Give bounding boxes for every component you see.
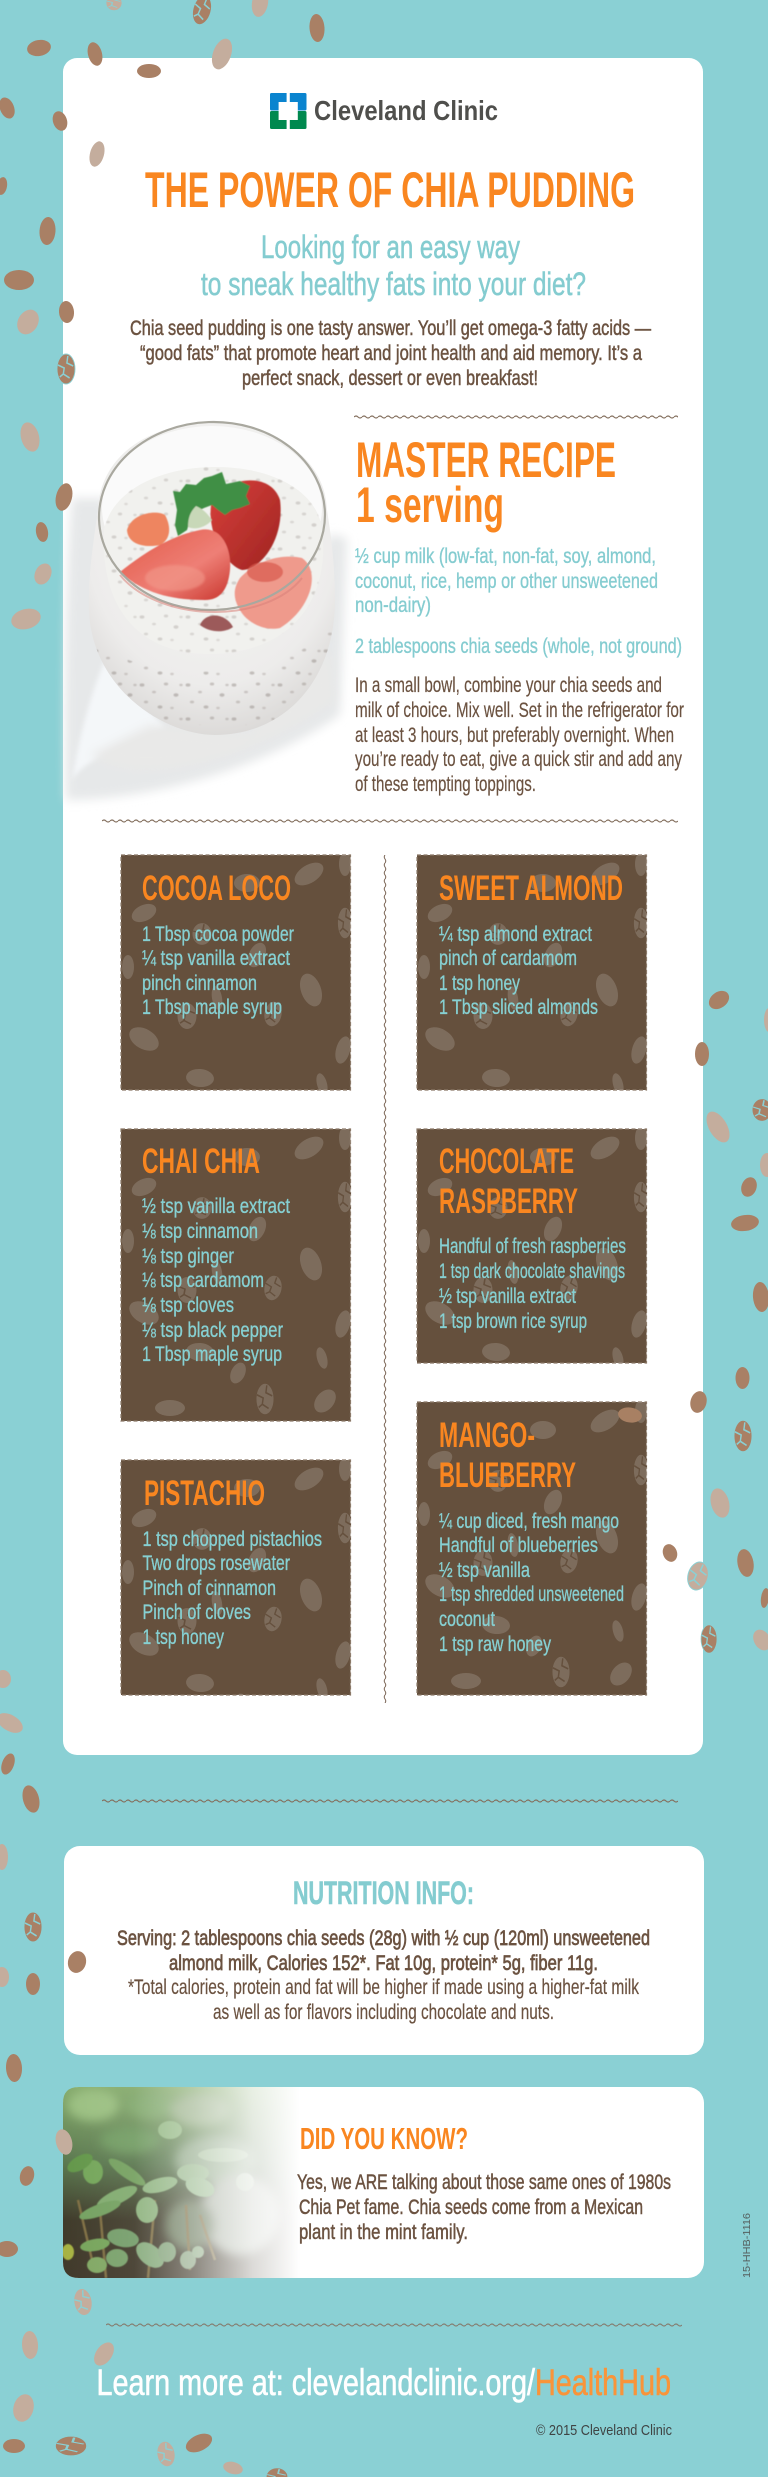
logo: Cleveland Clinic: [270, 93, 498, 129]
text: ingredients: ½ cup milk (low-fat, non-fat, soy, almond,: [355, 544, 656, 568]
heading: master recipe: [356, 432, 616, 533]
intro paragraph: [130, 316, 651, 390]
text: nutrition values: as well as for flavors including chocolate and nuts.: [213, 2000, 554, 2024]
card: sweet almond: pinch of cardamom: [439, 946, 577, 970]
card: mango blueberry: MANGO-: [439, 1416, 535, 1455]
card: pistachio: Pinch of cloves: [142, 1600, 251, 1624]
text: nutrition values: [117, 1926, 650, 2024]
subtitle: to sneak healthy fats into your diet?: [201, 266, 586, 302]
card: chai chia: ⅛ tsp cloves: [142, 1293, 234, 1317]
heading: did you know: DID YOU KNOW?: [300, 2121, 468, 2156]
card: chocolate raspberry: [417, 1126, 649, 1417]
panel: did you know: [62, 2087, 704, 2278]
card: pistachio: PISTACHIO: [144, 1474, 265, 1513]
panel: nutrition info: [64, 1846, 704, 2055]
card: mango blueberry: ½ tsp vanilla: [439, 1558, 530, 1582]
text: chia pet fact: plant in the mint family.: [299, 2220, 468, 2244]
text: nutrition values: almond milk, Calories 152*. Fat 10g, protein* 5g, fiber 11g.: [169, 1951, 598, 1975]
card: mango blueberry: 1 tsp raw honey: [439, 1632, 551, 1656]
card: cocoa loco: 1 Tbsp maple syrup: [142, 995, 282, 1019]
card: mango blueberry: BLUEBERRY: [439, 1456, 576, 1495]
text: chia pet fact: [297, 2170, 671, 2244]
card: chocolate raspberry: Handful of fresh raspberries: [439, 1234, 626, 1258]
photo: chia pudding in glass with strawberries: [65, 418, 347, 800]
card: chocolate raspberry: ½ tsp vanilla extract: [439, 1284, 576, 1308]
text: ingredients: coconut, rice, hemp or other unsweetened: [355, 569, 658, 593]
card: sweet almond: ¼ tsp almond extract: [439, 922, 592, 946]
logo: Cleveland Clinic: Cleveland Clinic: [314, 95, 498, 126]
card: chai chia: ½ tsp vanilla extract: [142, 1194, 290, 1218]
code: 15-HHB-1116: 15-HHB-1116: [742, 2213, 753, 2278]
card: cocoa loco: pinch cinnamon: [142, 971, 257, 995]
subtitle: [201, 229, 586, 302]
heading: master recipe: MASTER RECIPE: [356, 432, 616, 488]
photo: chia plants: [62, 2087, 300, 2278]
card: pistachio: Two drops rosewater: [142, 1551, 290, 1575]
card: sweet almond: [417, 852, 649, 1143]
card: cocoa loco: 1 Tbsp cocoa powder: [142, 922, 294, 946]
call to action link: Learn more at: clevelandclinic.org/HealthHub: [96, 2362, 671, 2403]
card: chocolate raspberry: 1 tsp dark chocolate shavings: [439, 1259, 625, 1283]
text: directions: of these tempting toppings.: [355, 772, 536, 796]
card: cocoa loco: COCOA LOCO: [142, 869, 291, 908]
text: ingredients: non-dairy): [355, 593, 431, 617]
heading: nutrition info: NUTRITION INFO:: [293, 1875, 474, 1911]
card: chai chia: ⅛ tsp black pepper: [142, 1318, 283, 1342]
text: directions: [355, 673, 684, 796]
card: cocoa loco: [121, 852, 353, 1143]
card: chai chia: [121, 1126, 353, 1421]
card: pistachio: 1 tsp honey: [142, 1625, 224, 1649]
card: chocolate raspberry: CHOCOLATE: [439, 1142, 574, 1181]
card: chai chia: 1 Tbsp maple syrup: [142, 1342, 282, 1366]
card: cocoa loco: ¼ tsp vanilla extract: [142, 946, 290, 970]
card: mango blueberry: 1 tsp shredded unsweetened: [439, 1582, 624, 1606]
card: mango blueberry: coconut: [439, 1607, 495, 1631]
card: sweet almond: 1 Tbsp sliced almonds: [439, 995, 598, 1019]
panel: main white card: [63, 58, 703, 1755]
card: sweet almond: 1 tsp honey: [439, 971, 520, 995]
card: mango blueberry: ¼ cup diced, fresh mango: [439, 1509, 619, 1533]
card: chocolate raspberry: 1 tsp brown rice syrup: [439, 1309, 587, 1333]
card: chai chia: ⅛ tsp ginger: [142, 1244, 234, 1268]
text: chia pet fact: Chia Pet fame. Chia seeds come from a Mexican: [299, 2195, 643, 2219]
text: ingredients: [355, 544, 682, 658]
card: chai chia: CHAI CHIA: [142, 1142, 260, 1181]
copyright: © 2015 Cleveland Clinic: [536, 2422, 672, 2439]
heading: master recipe: 1 serving: [356, 477, 504, 533]
subtitle: Looking for an easy way: [261, 229, 520, 265]
intro paragraph: perfect snack, dessert or even breakfast!: [242, 366, 538, 390]
card: pistachio: Pinch of cinnamon: [142, 1576, 276, 1600]
card: chai chia: ⅛ tsp cinnamon: [142, 1219, 258, 1243]
card: mango blueberry: [417, 1399, 649, 1695]
card: chai chia: ⅛ tsp cardamom: [142, 1268, 264, 1292]
card: chocolate raspberry: RASPBERRY: [439, 1182, 578, 1221]
card: pistachio: 1 tsp chopped pistachios: [142, 1527, 322, 1551]
card: pistachio: [121, 1457, 353, 1748]
card: sweet almond: SWEET ALMOND: [439, 869, 623, 908]
card: mango blueberry: Handful of blueberries: [439, 1533, 598, 1557]
